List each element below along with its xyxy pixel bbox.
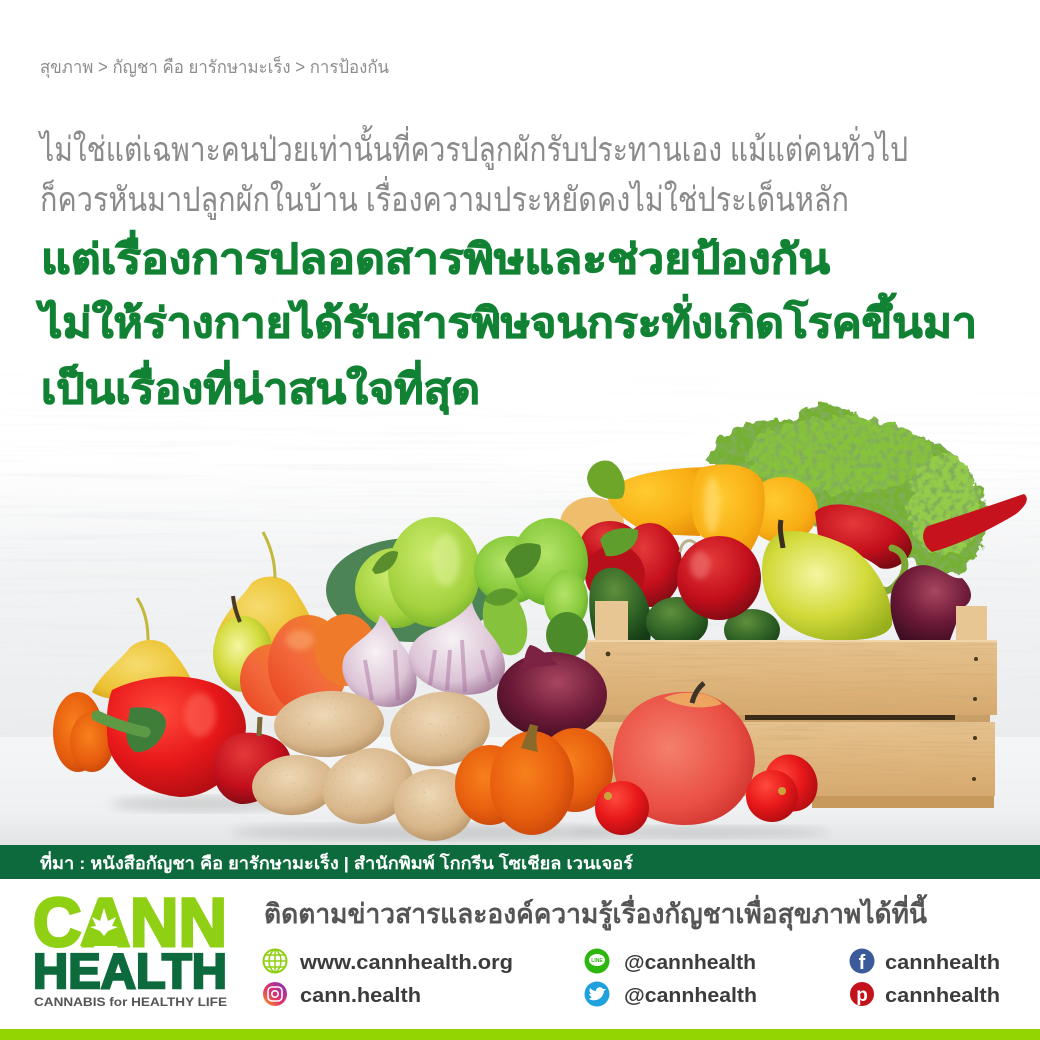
pumpkin: [455, 724, 613, 835]
illustration: vegetables and crate: [53, 404, 1027, 841]
red chili peppers: [815, 494, 1027, 591]
red bell pepper: [97, 676, 246, 797]
contact: facebook: cannhealth: [885, 952, 1000, 974]
breadcrumb: สุขภาพ > กัญชา คือ ยารักษามะเร็ง > การป้องกัน: [40, 55, 389, 78]
logo: Cann Health: [33, 884, 227, 1009]
bottom lime bar: [0, 1029, 1040, 1040]
contact: line: @cannhealth: [624, 952, 756, 974]
contact: facebook: [850, 948, 1000, 974]
source band: ที่มา : หนังสือกัญชา คือ ยารักษามะเร็ง | สำนักพิมพ์ โกกรีน โซเชียล เวนเจอร์: [40, 851, 634, 874]
small red apple: [213, 717, 291, 804]
contact: twitter: @cannhealth: [624, 985, 757, 1007]
contact: twitter: [584, 982, 757, 1007]
contact: website: [263, 949, 513, 974]
orange squash: [240, 614, 377, 716]
headline text: แต่เรื่องการปลอดสารพิษและช่วยป้องกัน: [41, 230, 830, 282]
contact: line: [584, 948, 756, 974]
headline text: [36, 230, 977, 415]
logo: Cann Health: CANN: [33, 884, 227, 961]
logo: Cann Health: CANNABIS for HEALTHY LIFE: [34, 995, 227, 1009]
yellow long pepper: [587, 461, 708, 536]
big apple: [613, 683, 755, 825]
intro text: ก็ควรหันมาปลูกผักในบ้าน เรื่องความประหยัดคงไม่ใช่ประเด็นหลัก: [40, 176, 849, 220]
cherry tomatoes: [595, 746, 827, 835]
red onion: [497, 645, 607, 738]
large green pear: [762, 520, 892, 640]
icon: cannabis leaf: [90, 908, 118, 936]
intro text: [38, 125, 908, 220]
contact: pinterest: p: [856, 985, 868, 1006]
lettuce: [706, 404, 988, 575]
footer background: [0, 879, 1040, 1029]
contact: facebook: f: [859, 952, 866, 974]
yellow pears: [92, 532, 312, 702]
contact: instagram: cann.health: [300, 985, 421, 1007]
contact: website: www.cannhealth.org: [299, 952, 513, 974]
green pear: [213, 596, 273, 692]
follow heading: ติดตามข่าวสารและองค์ความรู้เรื่องกัญชาเพื่อสุขภาพได้ที่นี้: [264, 893, 928, 931]
contact: line: LINE: [591, 958, 603, 964]
yellow bell pepper: [691, 464, 818, 559]
source band: [0, 845, 1040, 879]
contact: pinterest: cannhealth: [885, 985, 1000, 1007]
red pepper in crate: [580, 521, 682, 607]
purple onion in crate: [890, 565, 971, 640]
red apple in crate: [677, 536, 761, 620]
logo: Cann Health: HEALTH: [33, 945, 227, 999]
left orange pumpkin: [53, 692, 114, 772]
green bell peppers: [355, 517, 588, 660]
contact: instagram: [263, 982, 421, 1007]
potatoes: [250, 685, 495, 841]
cucumbers: [589, 568, 780, 651]
garlic bulbs: [342, 602, 505, 707]
headline text: เป็นเรื่องที่น่าสนใจที่สุด: [41, 360, 480, 415]
contact: pinterest: [850, 982, 1000, 1007]
wooden crate: [585, 601, 997, 808]
melon: [560, 497, 624, 551]
headline text: ไม่ให้ร่างกายได้รับสารพิษจนกระทั่งเกิดโรคขึ้นมา: [36, 293, 977, 346]
watermelon: [326, 538, 498, 642]
